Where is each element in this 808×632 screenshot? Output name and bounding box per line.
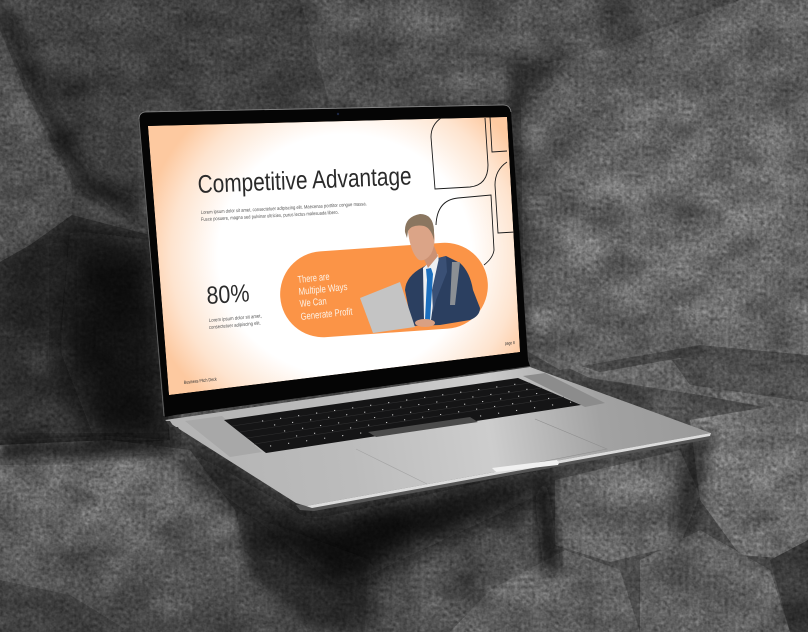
- stat caption: consectetuer adipiscing elit.: [209, 320, 261, 331]
- pill text: There are: [297, 272, 330, 286]
- neck: [424, 246, 438, 268]
- backpack strap: [450, 262, 460, 305]
- trackpad: [356, 449, 427, 484]
- slide background: [148, 117, 520, 395]
- shirt: [423, 254, 439, 320]
- head: [408, 222, 435, 260]
- stat: 80%: 80%: [206, 279, 250, 310]
- body text: [201, 202, 366, 222]
- orange pill: [277, 240, 491, 340]
- front notch: [492, 460, 559, 472]
- decorative outlines: [431, 117, 515, 265]
- ports: [166, 421, 174, 427]
- laptop base: [165, 367, 711, 511]
- footer left: Business Pitch Deck: [184, 377, 217, 385]
- pill text: Generate Profit: [300, 307, 353, 323]
- screen bezel: [139, 105, 530, 417]
- pill text: We Can: [299, 296, 327, 310]
- suit: [405, 256, 480, 326]
- stat caption: Lorem ipsum dolor sit amet,: [209, 313, 262, 324]
- keyboard: [224, 378, 581, 453]
- photo: businessman with laptop: [360, 214, 480, 333]
- pill text: Multiple Ways: [298, 282, 348, 298]
- title: Competitive Advantage: [197, 162, 412, 199]
- hair: [405, 214, 434, 240]
- hand: [415, 319, 435, 327]
- laptop: [139, 105, 711, 511]
- pill text: [297, 274, 353, 320]
- tie: [425, 268, 433, 321]
- stat caption: [209, 314, 262, 329]
- body text: Lorem ipsum dolor sit amet, consectetuer adipiscing elit. Maecenas porttitor congue massa.: [201, 201, 367, 216]
- page number: page 8: [505, 340, 515, 346]
- laptop in photo: [360, 282, 415, 333]
- slide on screen: [148, 117, 520, 395]
- body text: Fusce posuere, magna sed pulvinar ultricies, purus lectus malesuada libero.: [201, 210, 339, 223]
- lapel: [432, 256, 447, 312]
